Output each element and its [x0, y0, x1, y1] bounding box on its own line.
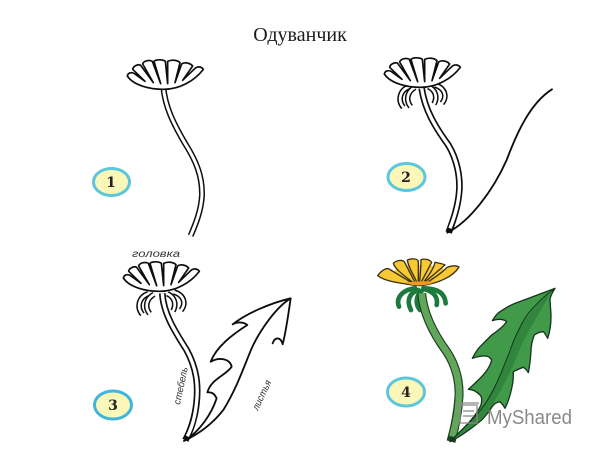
title: Одуванчик — [253, 24, 347, 46]
leaf — [450, 288, 555, 442]
label: листья: листья — [250, 378, 274, 413]
yellow petals — [378, 259, 459, 286]
label: головка: головка — [132, 249, 181, 260]
icon: watermark logo — [458, 403, 479, 423]
icon: step badge 2: 2 — [401, 170, 411, 186]
label: стебель: стебель — [171, 366, 191, 406]
panel: step 1 flower head and stem — [127, 60, 203, 236]
sepals — [398, 288, 446, 310]
icon: step badge 2 — [388, 164, 425, 190]
stem — [422, 293, 459, 442]
icon: step badge 1: 1 — [106, 175, 116, 191]
leaf midrib — [450, 290, 553, 442]
panel: step 4 coloured dandelion — [378, 259, 555, 442]
panel: step 2 flower with sepals, stem and leaf line — [384, 58, 552, 233]
icon: step badge 3 — [94, 391, 132, 419]
icon: step badge 4 — [388, 378, 424, 406]
leaf shading — [453, 291, 552, 439]
icon: step badge 1 — [94, 168, 130, 196]
icon: step badge 3: 3 — [108, 398, 118, 414]
watermark text: MyShared — [487, 407, 572, 429]
panel: step 3 flower with stem and leaf outline — [123, 262, 291, 441]
icon: step badge 4: 4 — [401, 385, 411, 401]
